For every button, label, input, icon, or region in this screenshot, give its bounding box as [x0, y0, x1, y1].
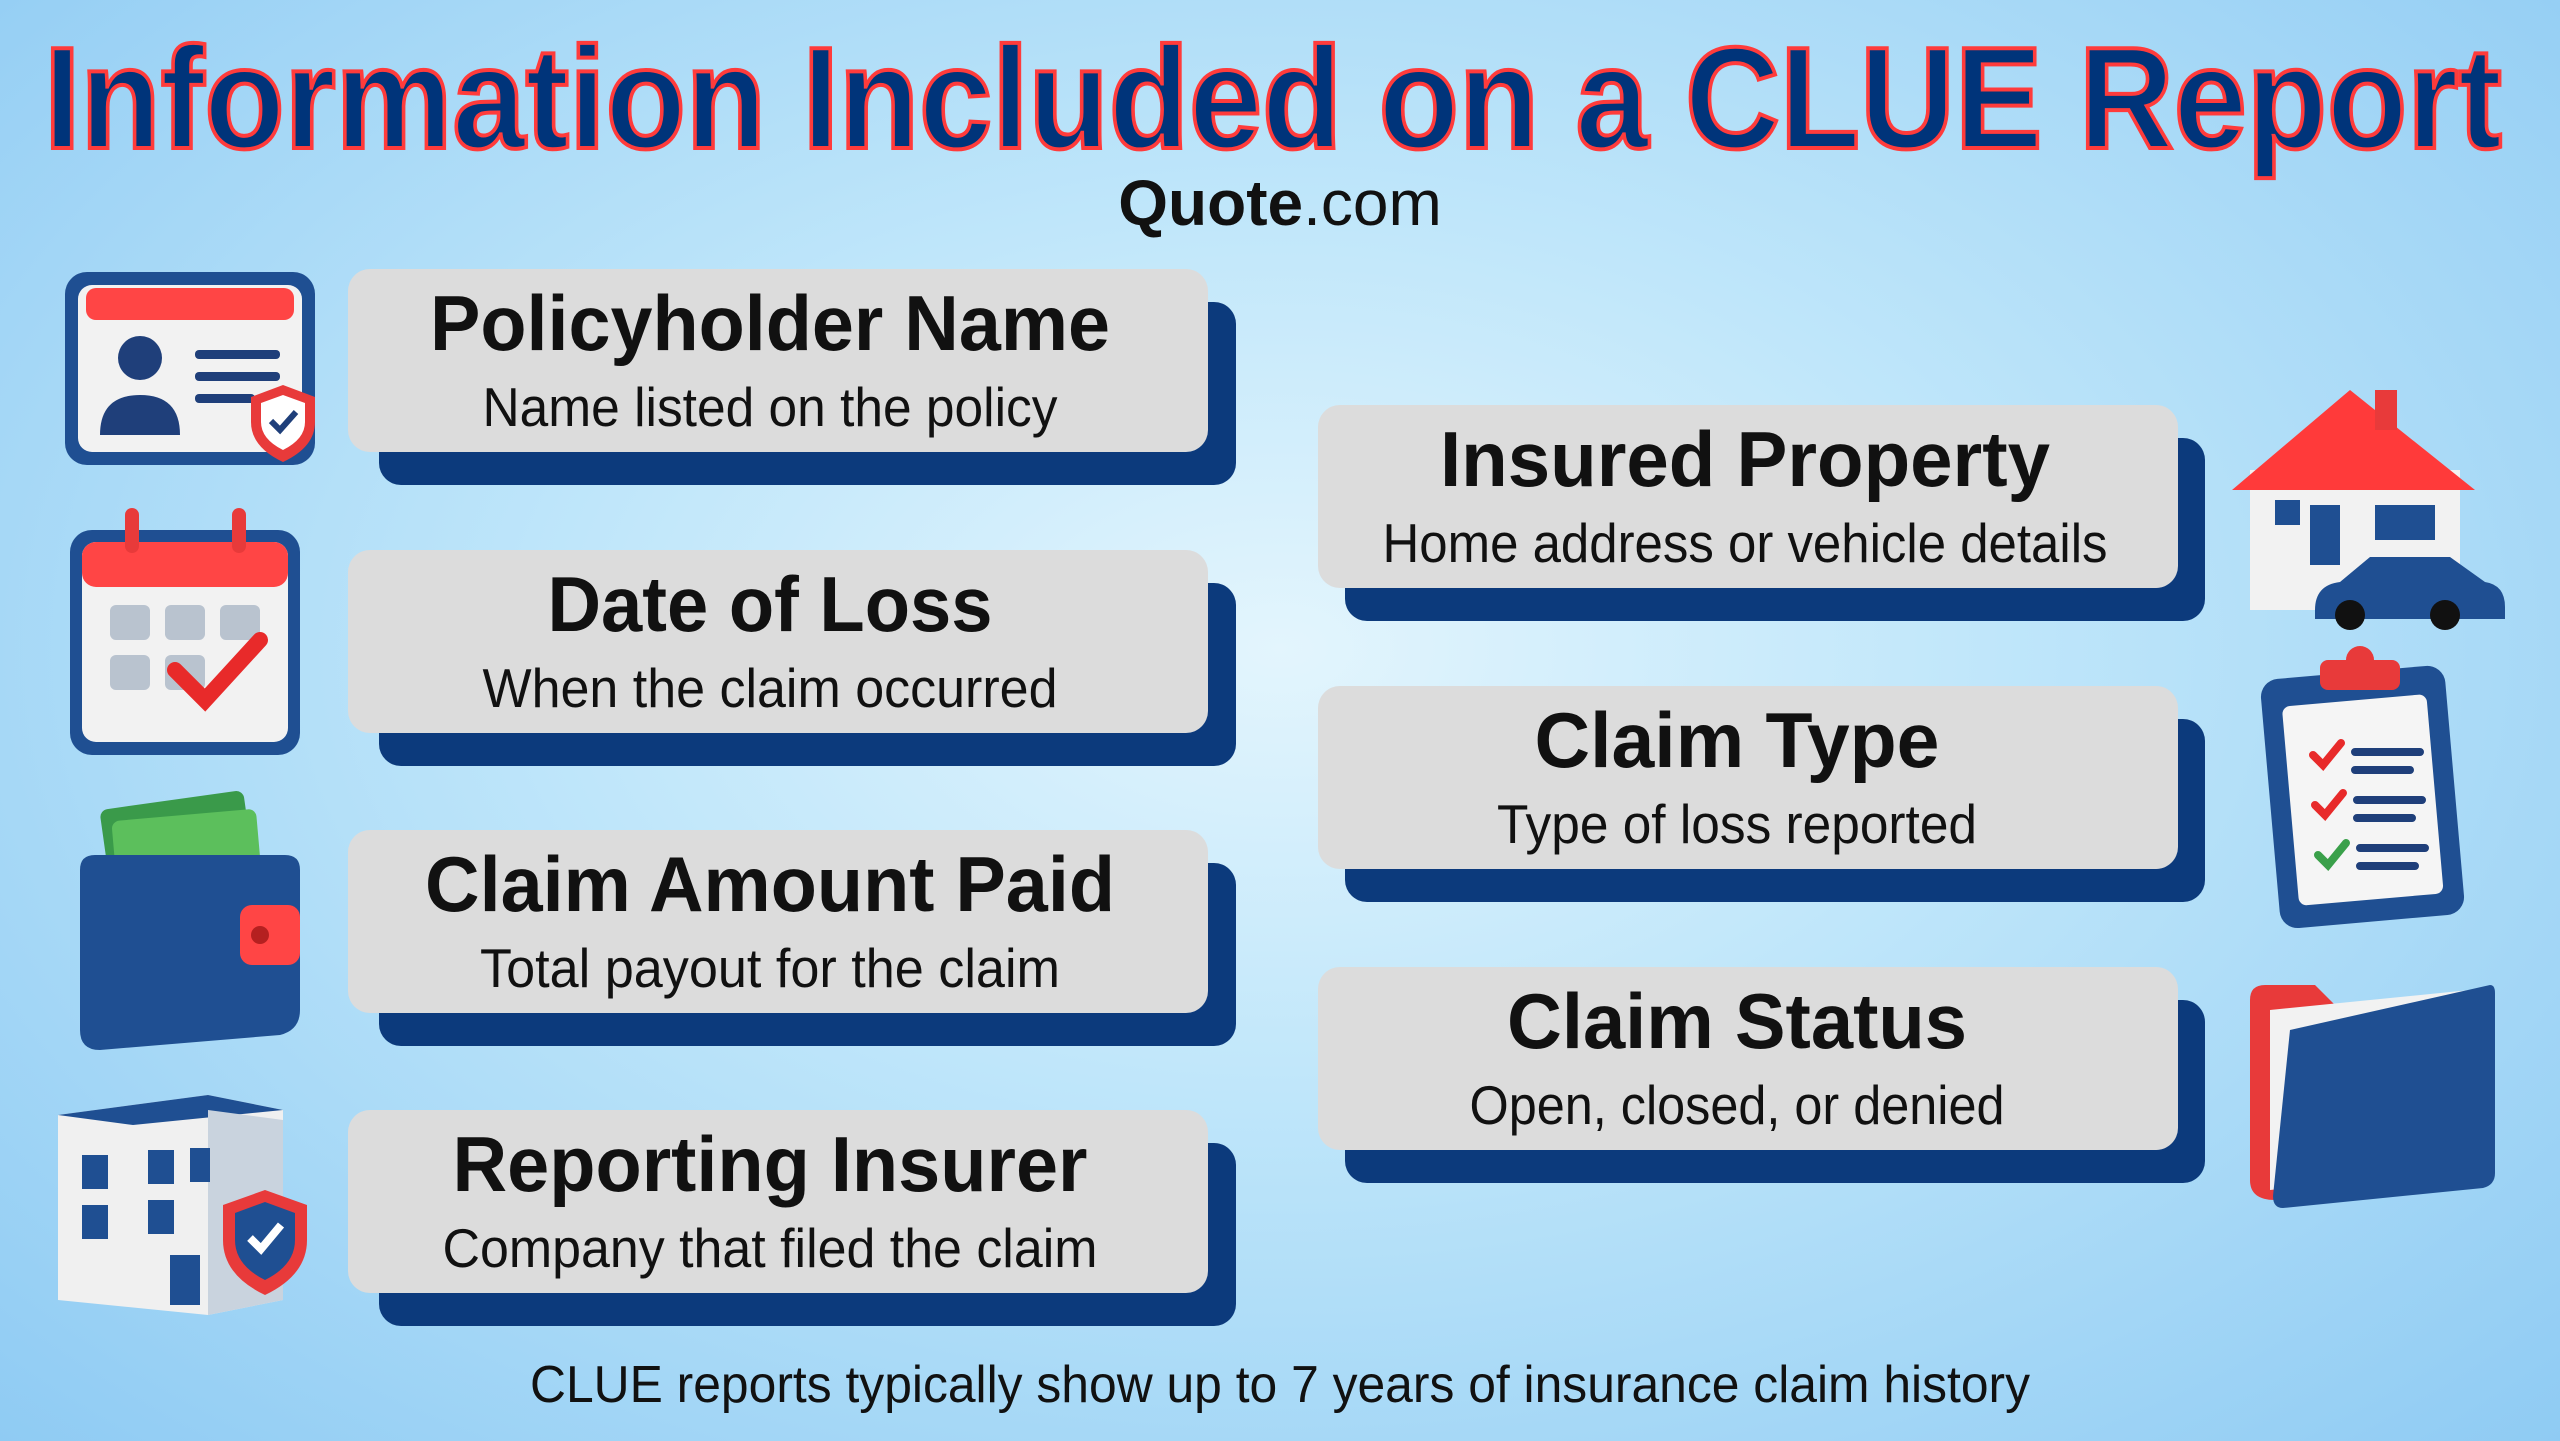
card: Policyholder Name — [348, 269, 1236, 485]
icon: folder — [2250, 985, 2495, 1208]
icon: wallet with cash — [80, 790, 300, 1050]
card: Policyholder Name: Name listed on the policy — [482, 376, 1058, 438]
footer note: CLUE reports typically show up to 7 years of insurance claim history — [530, 1356, 2030, 1414]
card: Claim Amount Paid — [348, 830, 1236, 1046]
card: Insured Property: Insured Property — [1440, 415, 2050, 503]
card: Reporting Insurer: Reporting Insurer — [452, 1120, 1088, 1208]
card: Claim Amount Paid: Total payout for the claim — [480, 937, 1060, 999]
icon: clipboard checklist — [2259, 646, 2466, 930]
icon: ID card — [65, 272, 315, 465]
card: Insured Property: Home address or vehicle details — [1382, 512, 2108, 574]
card: Reporting Insurer: Company that filed the claim — [442, 1217, 1098, 1279]
card: Date of Loss — [348, 550, 1236, 766]
card: Claim Status: Claim Status — [1507, 977, 1967, 1065]
card: Claim Status — [1318, 967, 2205, 1183]
logo: Quote.com: Quote.com — [1118, 167, 1442, 239]
card: Insured Property — [1318, 405, 2205, 621]
card: Reporting Insurer — [348, 1110, 1236, 1326]
icon: house with car — [2232, 390, 2505, 630]
card: Claim Type: Claim Type — [1534, 696, 1940, 784]
card: Claim Status: Open, closed, or denied — [1470, 1074, 2004, 1136]
card: Claim Type — [1318, 686, 2205, 902]
icon: building with shield — [58, 1095, 307, 1315]
card: Claim Amount Paid: Claim Amount Paid — [425, 840, 1115, 928]
card: Date of Loss: When the claim occurred — [482, 657, 1058, 719]
card: Policyholder Name: Policyholder Name — [430, 279, 1110, 367]
card: Claim Type: Type of loss reported — [1497, 793, 1977, 855]
card: Date of Loss: Date of Loss — [548, 560, 992, 648]
icon: calendar — [70, 508, 300, 755]
